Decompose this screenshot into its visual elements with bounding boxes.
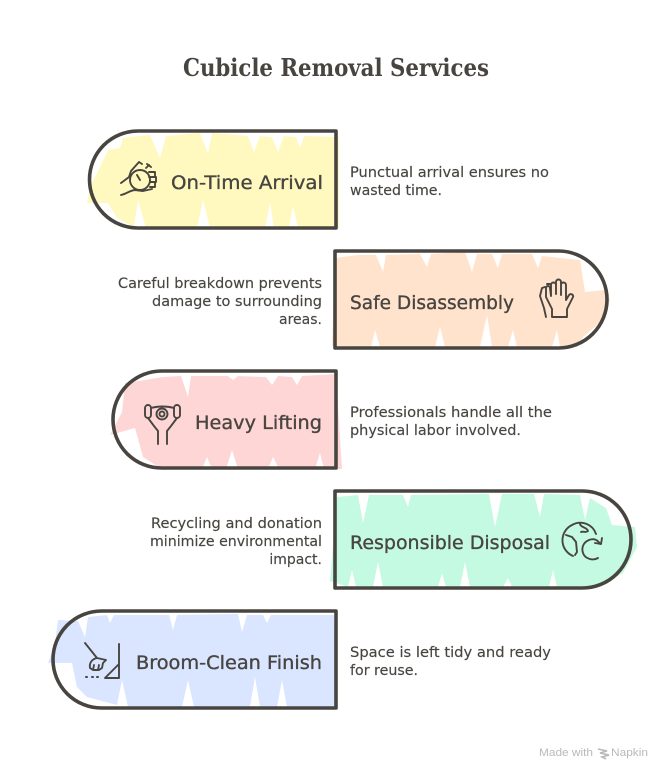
title: Cubicle Removal Services <box>183 53 489 82</box>
description: safe disassembly: areas. <box>279 312 322 328</box>
yellow scribble fill <box>87 133 339 228</box>
label: Heavy Lifting <box>195 412 322 434</box>
footer: made with napkin: Napkin <box>611 747 648 759</box>
label: Broom-Clean Finish <box>136 652 322 674</box>
description: broom-clean finish: for reuse. <box>350 663 418 679</box>
description: responsible disposal: impact. <box>269 552 322 568</box>
pill outline <box>335 251 607 348</box>
description: broom-clean finish: Space is left tidy and ready <box>350 645 551 661</box>
label: On-Time Arrival <box>171 172 323 194</box>
pill outline <box>335 491 631 588</box>
panel: heavy lifting <box>110 371 342 469</box>
pill outline <box>90 131 336 228</box>
peach scribble fill <box>332 252 610 347</box>
description: safe disassembly <box>118 276 322 328</box>
icon: hand holding stopwatch <box>121 162 156 195</box>
description: responsible disposal <box>150 516 322 568</box>
footer: made with napkin <box>539 747 648 759</box>
blue scribble fill <box>48 614 337 707</box>
icon: broom and dustpan <box>85 643 119 678</box>
description: on-time arrival <box>350 165 549 199</box>
description: responsible disposal: Recycling and donation <box>151 516 322 532</box>
label: Responsible Disposal <box>350 532 550 554</box>
description: broom-clean finish <box>350 645 551 679</box>
description: heavy lifting: Professionals handle all the <box>350 405 552 421</box>
panel: broom-clean finish <box>48 611 337 708</box>
green scribble fill <box>330 494 637 587</box>
description: heavy lifting: physical labor involved. <box>350 423 521 439</box>
pill outline <box>113 371 336 468</box>
panel: safe disassembly <box>332 251 610 348</box>
description: on-time arrival: Punctual arrival ensures no <box>350 165 549 181</box>
panel: responsible disposal <box>330 491 637 588</box>
footer: made with napkin: Made with <box>539 747 593 759</box>
label: Safe Disassembly <box>350 292 514 314</box>
description: on-time arrival: wasted time. <box>350 183 442 199</box>
pink scribble fill <box>110 374 342 469</box>
description: heavy lifting <box>350 405 552 439</box>
icon: work gloves <box>540 280 573 317</box>
icon: weightlifter <box>145 405 180 444</box>
pill outline <box>53 611 336 708</box>
panel: on-time arrival <box>87 131 339 228</box>
icon: recycling globe <box>562 523 602 559</box>
description: responsible disposal: minimize environmental <box>150 534 322 550</box>
description: safe disassembly: damage to surrounding <box>152 294 322 310</box>
description: safe disassembly: Careful breakdown prevents <box>118 276 322 292</box>
